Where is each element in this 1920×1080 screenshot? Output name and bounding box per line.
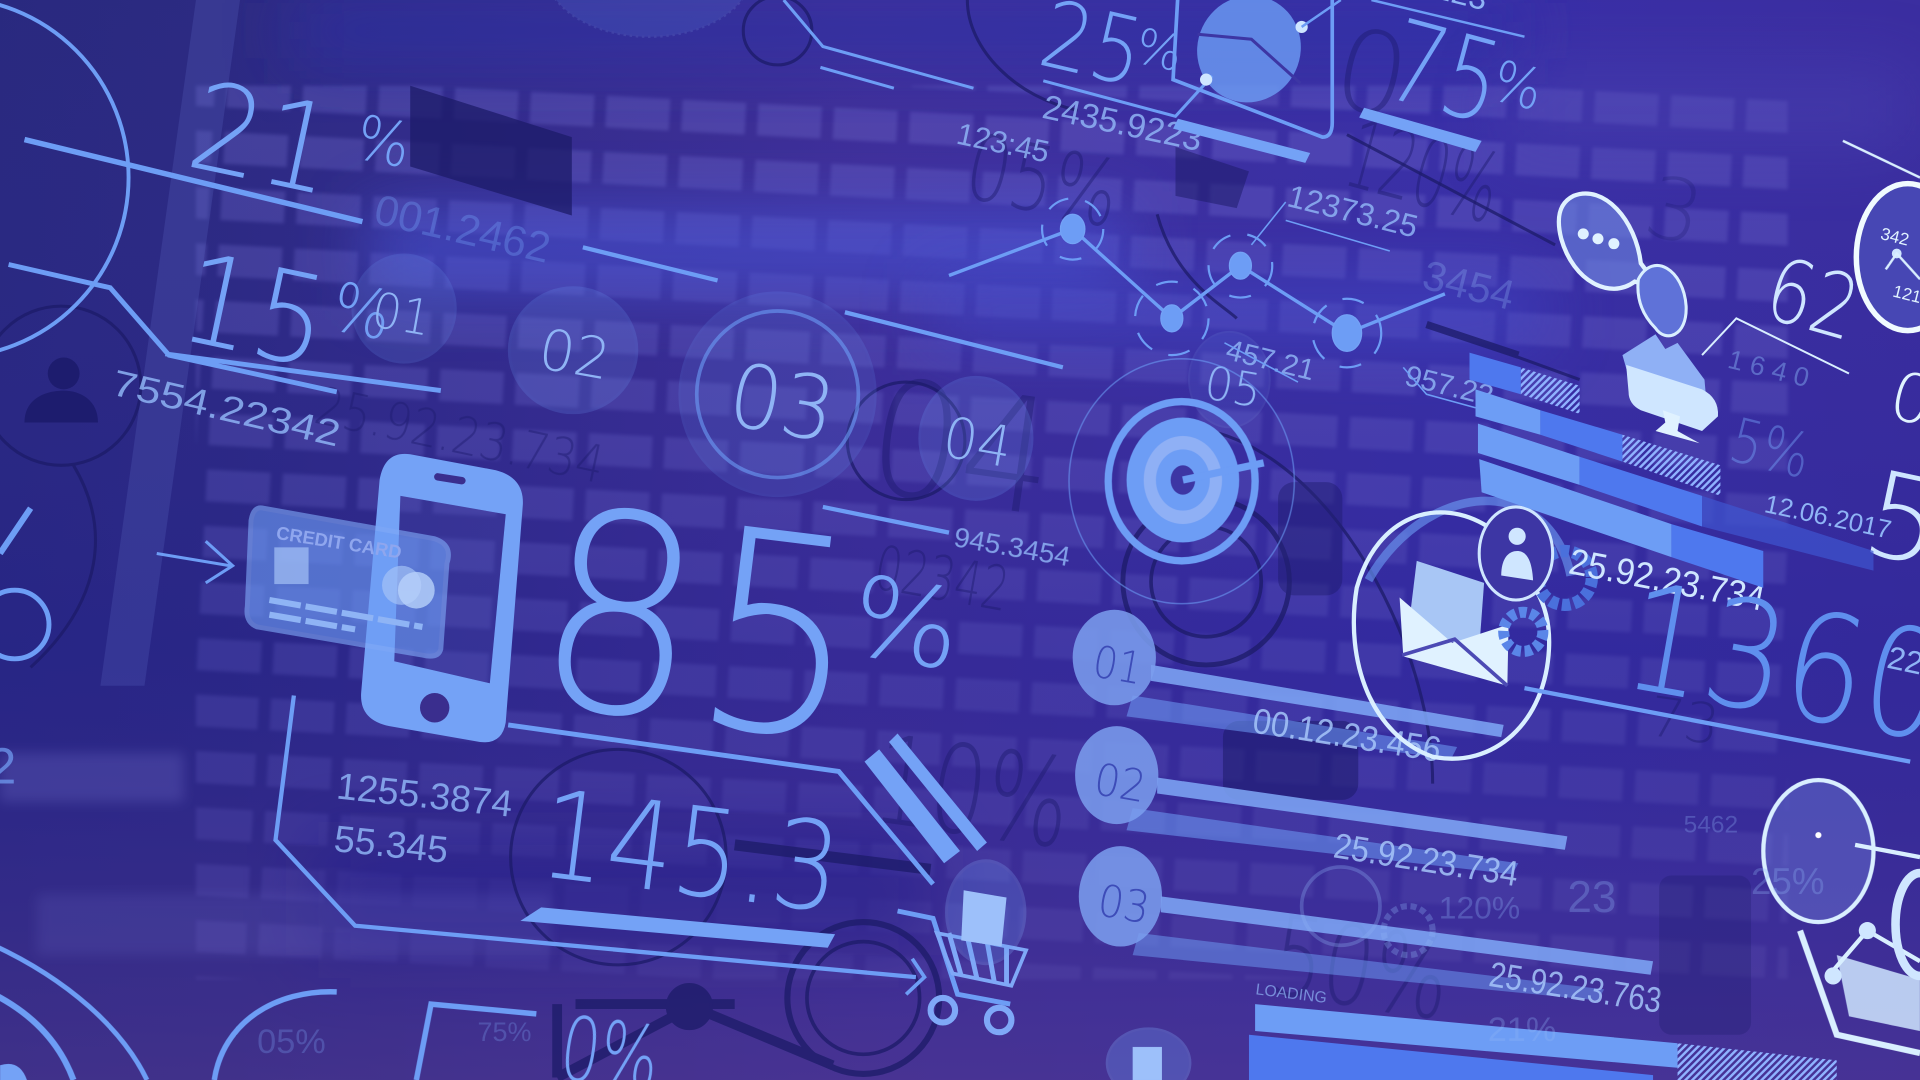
value 15% with connector xyxy=(9,225,441,454)
connector lines to cart xyxy=(276,696,933,994)
dark ghost numbers: 73 xyxy=(1645,684,1723,757)
gears xyxy=(1538,551,1592,605)
dark ghost numbers: 04 xyxy=(858,343,1066,553)
icon: bottom bag circle xyxy=(1107,1029,1190,1080)
circle 04: 04 xyxy=(938,405,1017,481)
dark ghost numbers: 0 xyxy=(1323,1,1421,145)
bar values xyxy=(1250,701,1664,1021)
small values near 04: 2435.9223 xyxy=(1039,88,1205,159)
small values near 04: 945.3454 xyxy=(952,522,1073,572)
left edge partial percent xyxy=(0,508,49,795)
dark ghost numbers: 05% xyxy=(957,113,1129,249)
numbered circles 01 to 05 xyxy=(353,255,1270,500)
line chart xyxy=(949,198,1476,408)
numbered bars 01 02 03 xyxy=(1073,610,1664,1021)
bottom right: shopping chart icon xyxy=(1763,780,1920,1053)
icon: speech bubble xyxy=(1559,194,1659,289)
bar 03 xyxy=(1079,846,1653,1000)
small values near 04: 457.21 xyxy=(1223,334,1318,387)
circle 01 xyxy=(353,255,456,362)
icon: credit card: CREDIT CARD xyxy=(275,522,403,563)
bar values: 00.12.23.456 xyxy=(1250,701,1444,770)
circle 02 xyxy=(509,288,637,413)
arrow to card xyxy=(157,541,233,583)
circle 05: 05 xyxy=(1201,356,1265,419)
address and value 1360: 12.06.2017 xyxy=(1762,490,1894,544)
dark ghost numbers: 120% xyxy=(1335,98,1512,246)
icon: shopping cart xyxy=(898,861,1026,1032)
top pie panel with 25% and 75%: % xyxy=(1130,17,1188,83)
small values xyxy=(332,765,515,871)
diagonal bars xyxy=(864,733,987,863)
circle and line: 21 percent xyxy=(0,0,362,358)
circle 02: 02 xyxy=(534,317,615,393)
big value 85%: 85 xyxy=(521,448,879,805)
circle 03: 03 xyxy=(721,343,843,463)
icon: person at monitor xyxy=(1622,265,1718,443)
small values near 04: 3454 xyxy=(1418,251,1519,319)
top pie panel with 25% and 75% xyxy=(545,0,1549,163)
stacked horizontal bars xyxy=(1469,353,1873,588)
small values near 04 xyxy=(952,88,1519,572)
small values: 1255.3874 xyxy=(335,765,515,825)
bar 01 xyxy=(1073,610,1504,759)
faint dashboard cluster: 23 xyxy=(1567,873,1616,922)
bar values: 25.92.23.763 xyxy=(1487,954,1664,1021)
bottom left arcs: 05% xyxy=(257,1023,326,1061)
value 21%: 21 xyxy=(178,54,349,224)
dark ghost numbers: 02342 xyxy=(869,533,1014,626)
dark ghost numbers: 5% xyxy=(1723,405,1817,493)
value 62: 1 6 4 0 xyxy=(1725,344,1812,393)
circle 01: 01 xyxy=(368,281,435,348)
bottom left arcs: 75% xyxy=(478,1017,531,1047)
value 15% with connector: 15 xyxy=(169,225,340,397)
bottom left arcs xyxy=(0,945,666,1080)
bar 02: 02 xyxy=(1090,754,1150,813)
icon: gauge: 342 xyxy=(1879,223,1911,250)
faint dashboard cluster: 120% xyxy=(1439,889,1520,925)
circle 05 xyxy=(1189,332,1270,427)
top pie panel with 25% and 75%: % xyxy=(1485,49,1549,124)
dark ghost numbers: 25.92.23.734 xyxy=(310,376,609,496)
small values near 04: 12373.25 xyxy=(1284,178,1422,245)
circle 04 xyxy=(920,377,1032,500)
bottom bars right xyxy=(1249,981,1837,1080)
address and value 1360 xyxy=(1524,444,1920,777)
value 62 xyxy=(1702,237,1920,442)
icon: smartphone xyxy=(361,454,523,742)
bar values: 25.92.23.734 xyxy=(1331,826,1521,894)
faint dashboard cluster: 5462 xyxy=(1684,812,1738,839)
dark ghost numbers: 3 xyxy=(1636,156,1713,266)
bar 02 xyxy=(1075,726,1567,874)
value 62: 62 xyxy=(1755,237,1871,361)
percent sign for 21: % xyxy=(350,102,417,183)
small values near 04: 957.23 xyxy=(1402,359,1497,413)
dark ghost numbers: 10% xyxy=(865,708,1079,876)
icon: user in dark circle xyxy=(24,358,98,422)
small number: 7554.22342 xyxy=(108,362,344,454)
value 145.3: 145.3 xyxy=(533,762,848,941)
big value 85%: % xyxy=(840,551,971,696)
bottom bars right: LOADING xyxy=(1255,981,1328,1007)
faint dashboard cluster: 25% xyxy=(1751,861,1825,902)
faint dashboard cluster xyxy=(1302,812,1825,1049)
icon: credit card xyxy=(247,508,448,656)
address and value 1360: 25.92.23.734 xyxy=(1566,541,1768,619)
icon: target with arrow xyxy=(1069,359,1294,604)
chart nodes xyxy=(1060,214,1362,351)
small values near 04: 123:45 xyxy=(954,117,1052,170)
dark ghost numbers xyxy=(310,1,1817,1045)
faint dashboard cluster: 21% xyxy=(1488,1011,1556,1049)
small values: 55.345 xyxy=(332,817,450,871)
circle 03 xyxy=(680,293,876,496)
user badge xyxy=(1479,507,1553,600)
dark ghost numbers: 50% xyxy=(1263,891,1459,1045)
value 15% with connector: % xyxy=(325,267,399,356)
faint number and line xyxy=(370,186,1063,533)
icon: mail in circle xyxy=(1301,460,1618,801)
faint number and line: 001.2462 xyxy=(370,186,555,273)
bar 03: 03 xyxy=(1094,875,1154,934)
icon: gauge xyxy=(1843,141,1920,331)
bar 01: 01 xyxy=(1089,637,1146,695)
